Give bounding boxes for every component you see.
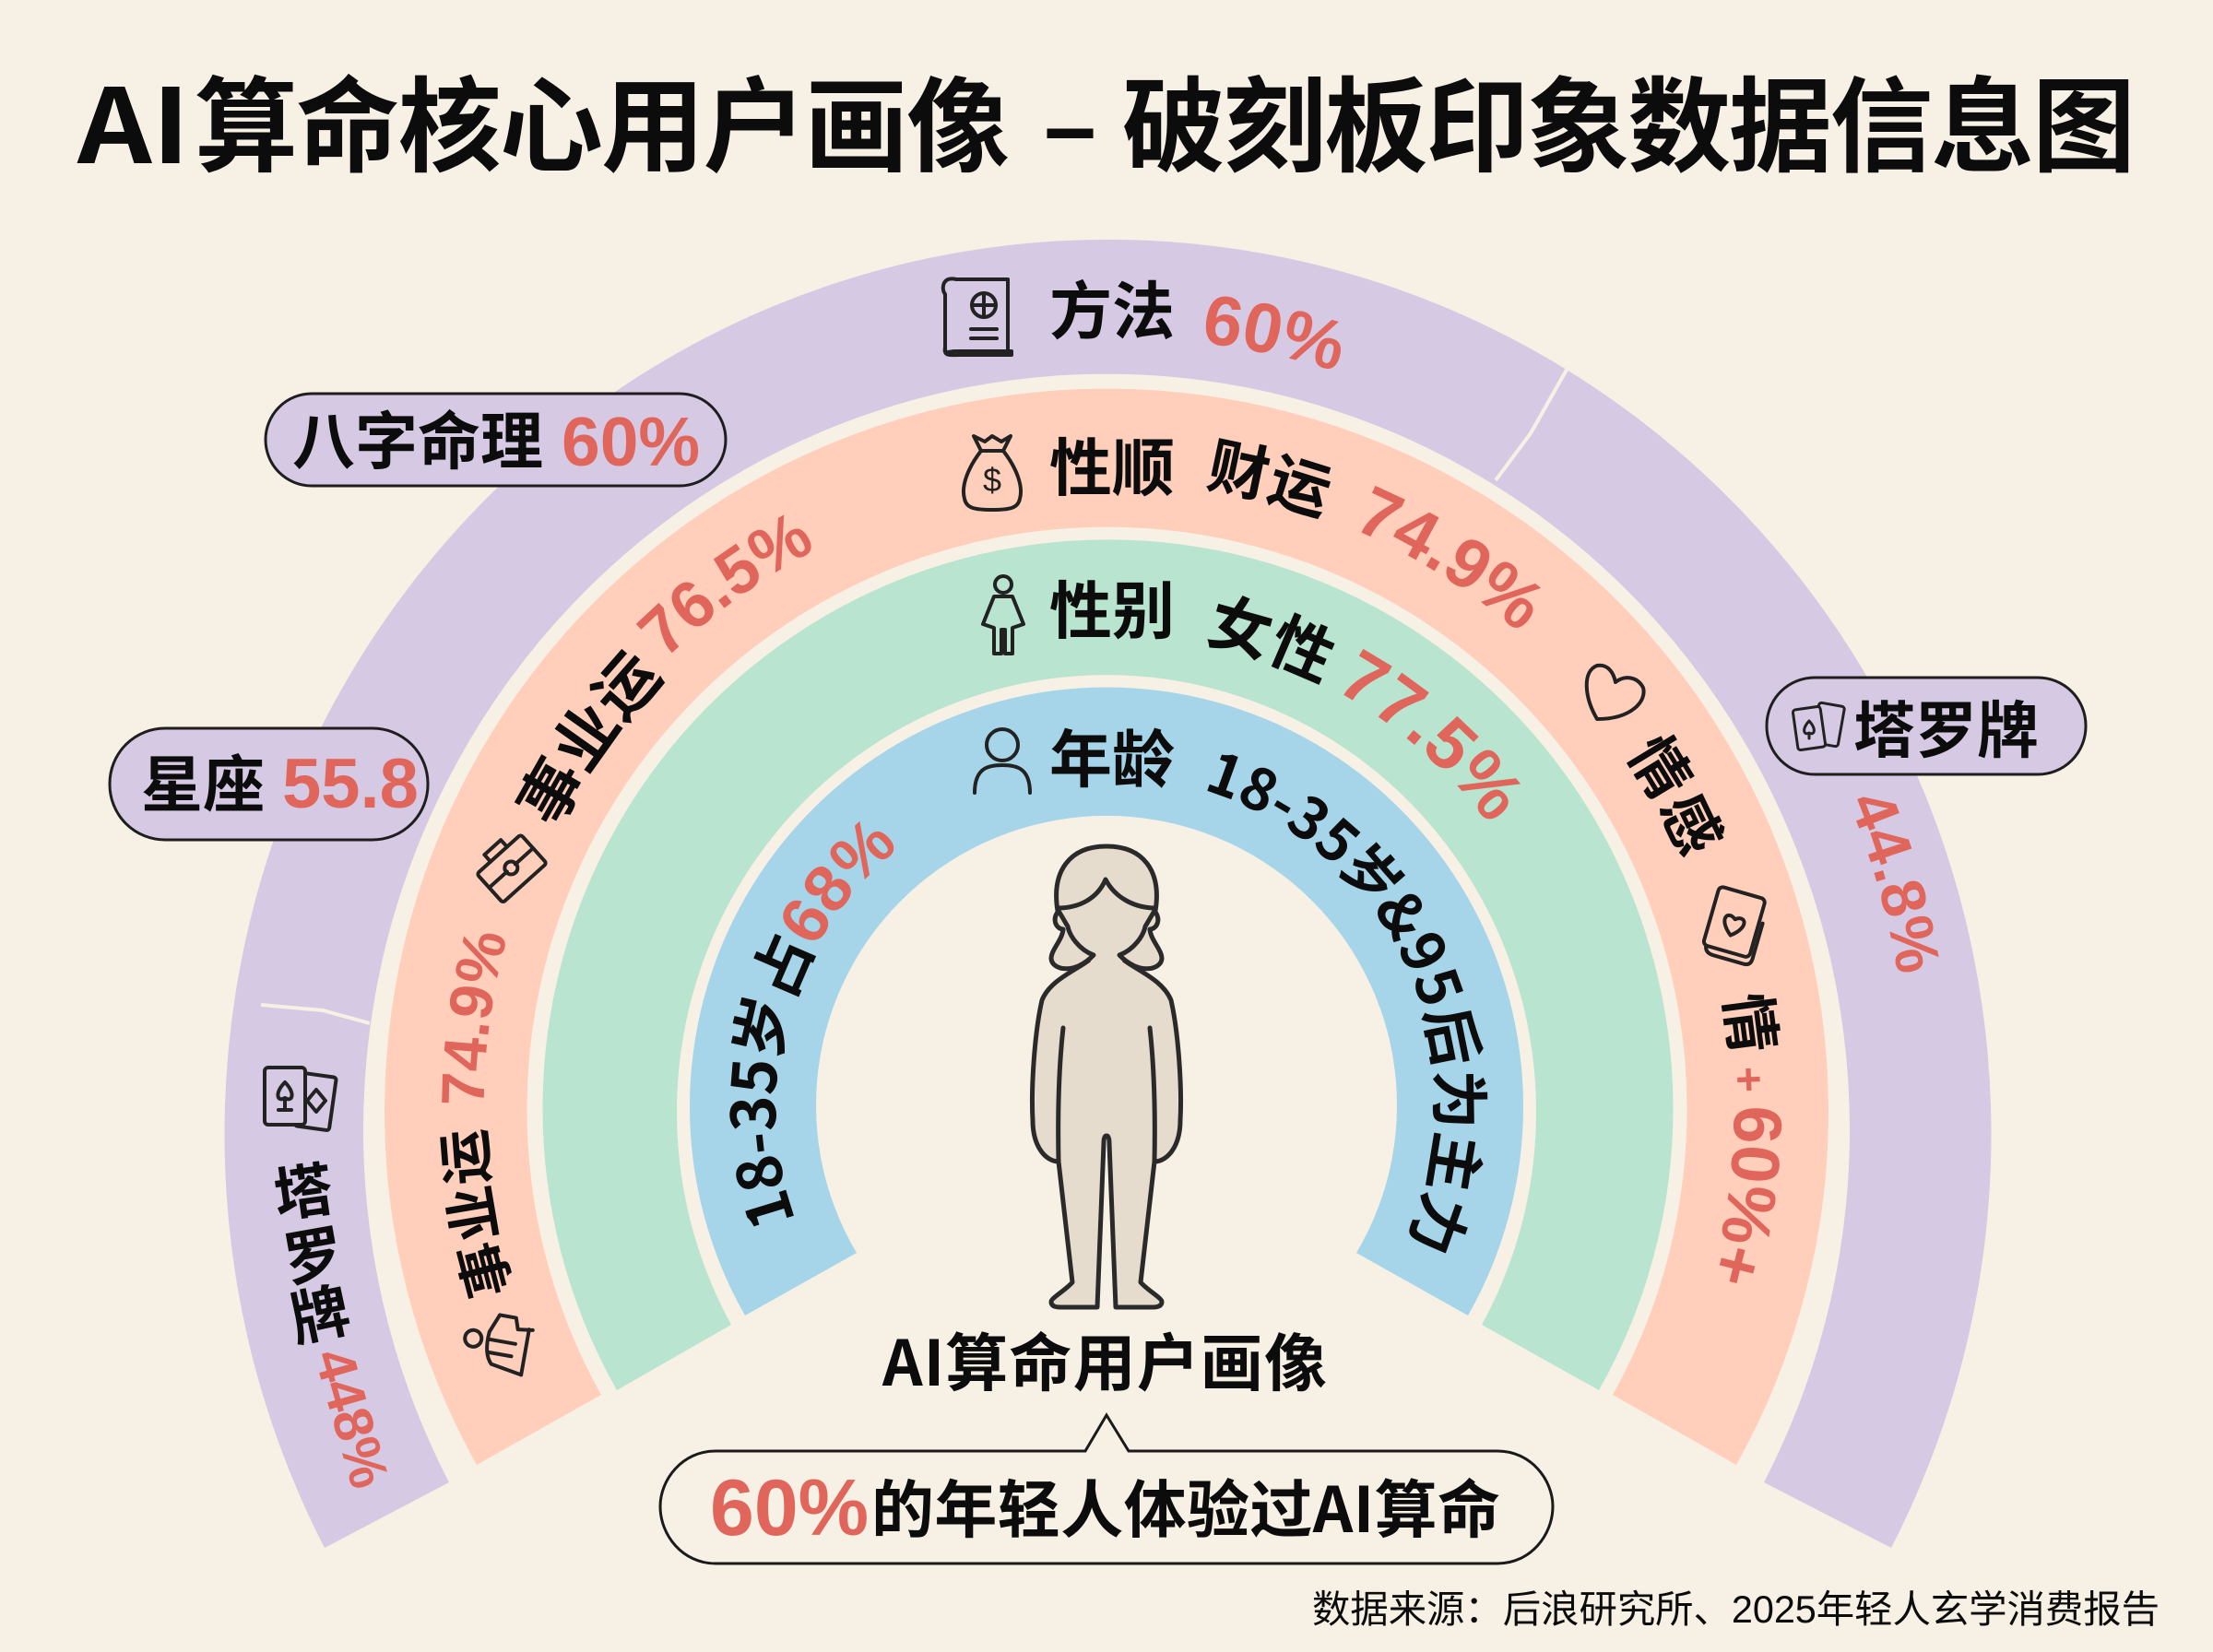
value: wealth 74.9%: 74.9% — [1361, 485, 1542, 628]
pill value: 55.8 — [282, 745, 419, 823]
label: tarot left — [267, 1142, 357, 1359]
value: 68%: 68% — [783, 820, 894, 940]
figure caption: AI算命用户画像 — [882, 1313, 1327, 1404]
title: 算命核心用户画像 — [195, 44, 1010, 194]
text: female 77.5%: 女性 77.5% — [1207, 596, 1521, 819]
text: career upper: 事业运 — [515, 649, 666, 822]
pill value: 60% — [562, 403, 700, 480]
pill: horoscope — [110, 728, 428, 840]
icon: money bag — [964, 436, 1021, 510]
label: method: 方法 — [1049, 261, 1175, 352]
icon: woman — [983, 576, 1024, 654]
text: age left arc: 18-35岁占 — [729, 933, 816, 1226]
pill text: 八字命理 — [292, 391, 543, 482]
group: green ring labels — [981, 560, 1521, 819]
callout text: 的年轻人体验过AI算命 — [871, 1459, 1500, 1551]
label: emotion: 情感 — [1627, 734, 1724, 857]
icon: heart card — [1701, 886, 1769, 966]
label: age: 年龄 — [1049, 709, 1175, 800]
icon: tarot cards lower left — [265, 1068, 337, 1130]
value: right tarot 44.8%: 44.8% — [1856, 796, 1939, 972]
text: wealth: 财运 — [1206, 438, 1331, 520]
text: age right arc second part: &95后为主力 — [1378, 894, 1488, 1254]
panel: blue ring — [690, 687, 1523, 1316]
value: left tarot 448%: 448% — [302, 1341, 401, 1494]
label: personality: 性顺 — [1049, 418, 1175, 509]
title: AI — [77, 44, 190, 194]
label: tarot left: 塔 — [267, 1142, 338, 1234]
center figure — [1032, 846, 1181, 1307]
title — [77, 44, 2136, 194]
pill text: 塔罗牌 — [1853, 681, 2039, 771]
source note: 数据来源：后浪研究所、2025年轻人玄学消费报告 — [1312, 1588, 2160, 1631]
pill: bazi — [266, 391, 726, 486]
callout — [660, 1415, 1553, 1564]
value: career 76.5%: 76.5% — [636, 514, 811, 653]
group: blue ring labels — [729, 709, 1488, 1254]
panel: salmon ring — [385, 389, 1828, 1465]
icon: book — [943, 278, 1012, 355]
icon: money bag: $ — [983, 461, 1001, 499]
icon: tarot cards — [1793, 702, 1845, 750]
text: emotion +60%+: 情 + 60%+ — [1719, 994, 1781, 1283]
title: 破刻板印象数据信息图 — [1122, 44, 2136, 194]
group: salmon ring labels — [395, 393, 1833, 1377]
icon: shirt figure — [460, 1310, 535, 1375]
icon: briefcase — [470, 828, 547, 903]
text: career lower: 事业运 — [440, 1129, 512, 1299]
label: tarot left: 罗 — [277, 1205, 349, 1299]
label: gender: 性别 — [1049, 560, 1175, 652]
panel: purple outer ring — [225, 240, 1992, 1548]
value: career 74.9%: 74.9% — [442, 933, 505, 1103]
label: tarot left: 牌 — [281, 1263, 357, 1359]
value: method 60%: 60% — [1206, 297, 1341, 369]
figure left hair — [1051, 911, 1094, 969]
group: purple ring labels — [263, 261, 1939, 1527]
text: age right arc first part: 18-35岁 — [1207, 754, 1405, 891]
figure head fill — [1057, 846, 1156, 963]
pill: tarot — [1767, 678, 2086, 774]
callout value: 60% — [710, 1464, 869, 1552]
title: – — [1042, 44, 1098, 194]
icon: heart — [1587, 666, 1644, 719]
icon: person bust — [975, 729, 1030, 793]
figure body — [1032, 955, 1181, 1307]
pill text: 星座 — [141, 736, 265, 825]
figure right hair — [1119, 911, 1162, 969]
panel: green ring — [542, 539, 1673, 1390]
